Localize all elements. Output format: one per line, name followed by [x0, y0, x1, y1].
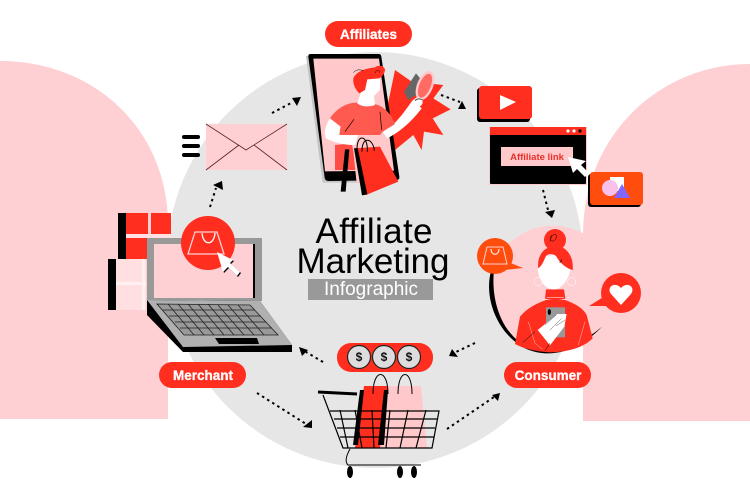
label: Consumer: Consumer [515, 368, 582, 383]
illustration: affiliate in phone with megaphone [306, 54, 451, 195]
laptop [147, 238, 292, 352]
woman [515, 300, 593, 352]
arrow: consumer to coins [449, 343, 475, 357]
central grey circle [167, 52, 583, 468]
icon: cursor [568, 157, 589, 177]
label: Merchant: Merchant [173, 368, 234, 383]
browser window with affiliate link [489, 127, 589, 185]
keyboard [157, 304, 278, 335]
arrow: merchant to cart [257, 393, 312, 428]
dollar coins pill: $ [381, 350, 388, 364]
dollar coins pill [337, 343, 433, 372]
subtitle: Infographic: Infographic [324, 279, 418, 300]
icon: heart bubble [589, 273, 641, 313]
icon: shopping bag circle with cursor [181, 216, 241, 277]
title [296, 212, 450, 281]
icon: video play card [477, 86, 532, 122]
shopping bags [341, 149, 349, 192]
left pink arch [0, 61, 168, 419]
dollar coins pill: $ [356, 350, 363, 364]
arrow: affiliates to video [441, 95, 466, 109]
arrow: browser to consumer [543, 190, 555, 218]
icon: email envelope [206, 124, 287, 170]
label: Affiliates [325, 21, 412, 47]
title: Affiliate [316, 212, 432, 251]
arrow: cart to consumer [447, 393, 500, 429]
icon: shapes card [588, 172, 643, 207]
arrow: merchant email to affiliates [272, 97, 301, 113]
merchant windows [108, 213, 171, 310]
browser window with affiliate link: Affiliate link [510, 152, 565, 163]
consumer illustration [489, 226, 616, 353]
arrow: coins to laptop [299, 347, 323, 362]
person [335, 143, 357, 170]
megaphone [404, 73, 430, 101]
label: Consumer [504, 362, 591, 388]
label: Merchant [159, 362, 246, 388]
icon: shopping bag bubble [477, 238, 523, 274]
shopping cart with bags [318, 374, 439, 478]
title: Marketing [296, 242, 450, 281]
arrow: laptop to email [210, 181, 223, 207]
right pink arch [583, 64, 750, 421]
label: Affiliates: Affiliates [340, 27, 397, 42]
icon: menu lines [182, 135, 200, 157]
dollar coins pill: $ [406, 350, 413, 364]
